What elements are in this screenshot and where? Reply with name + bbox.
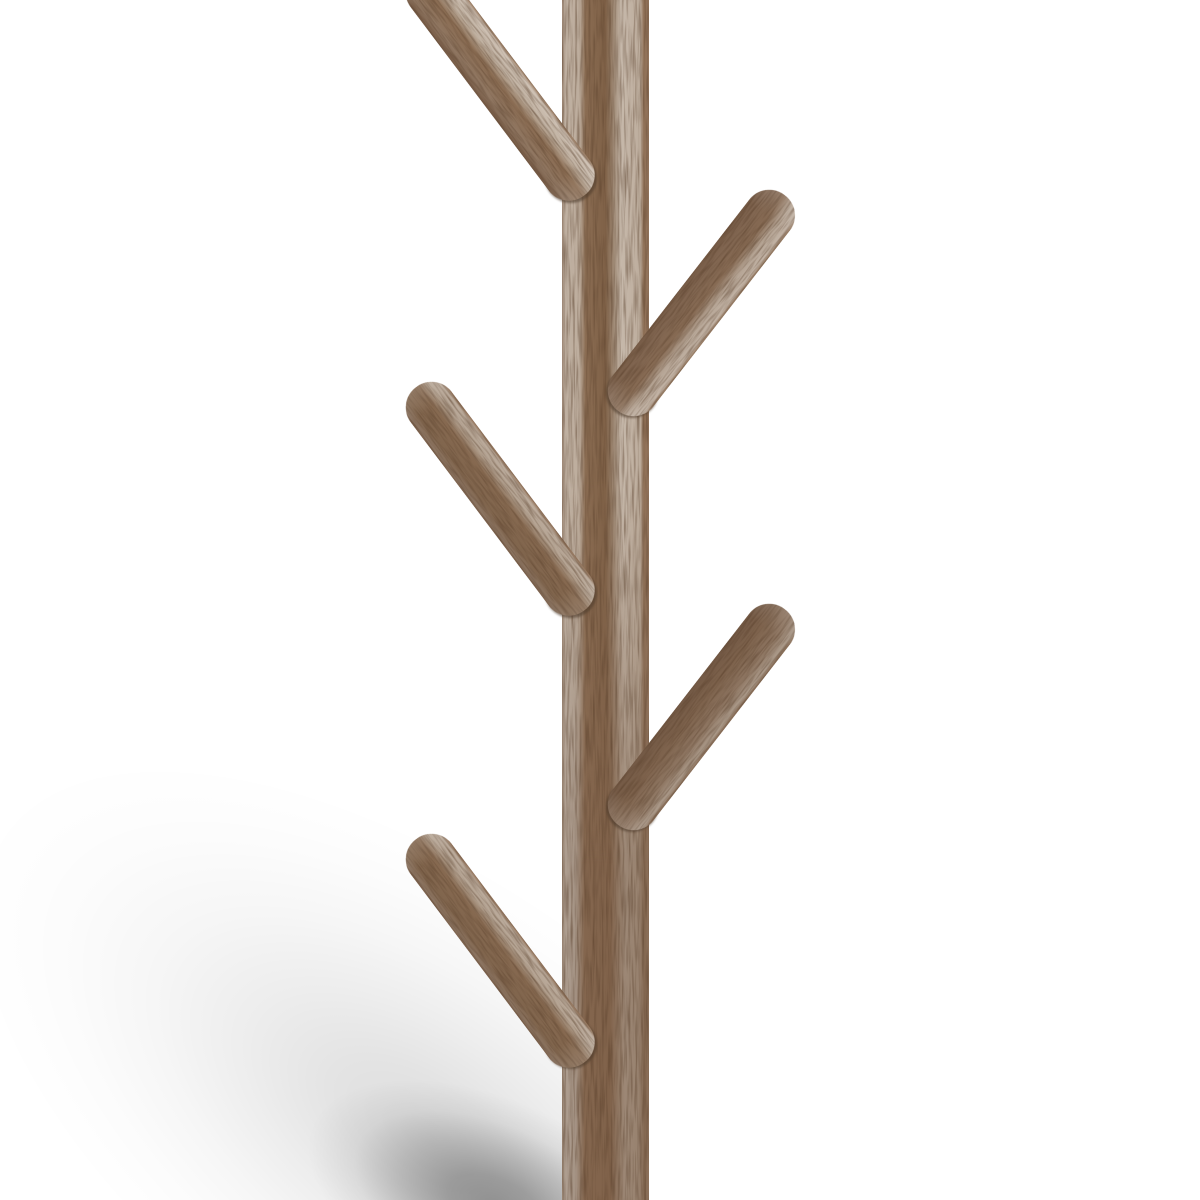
product illustration: wooden coat stand xyxy=(146,0,796,1200)
peg 4: lower right xyxy=(598,594,805,840)
peg 3: middle left xyxy=(396,372,605,626)
peg 1: top left, cropped by the frame xyxy=(396,0,605,211)
pole xyxy=(562,0,649,1200)
floor shadow xyxy=(0,700,562,1200)
peg 2: upper right xyxy=(598,180,805,426)
peg 5: lower left xyxy=(396,824,605,1078)
